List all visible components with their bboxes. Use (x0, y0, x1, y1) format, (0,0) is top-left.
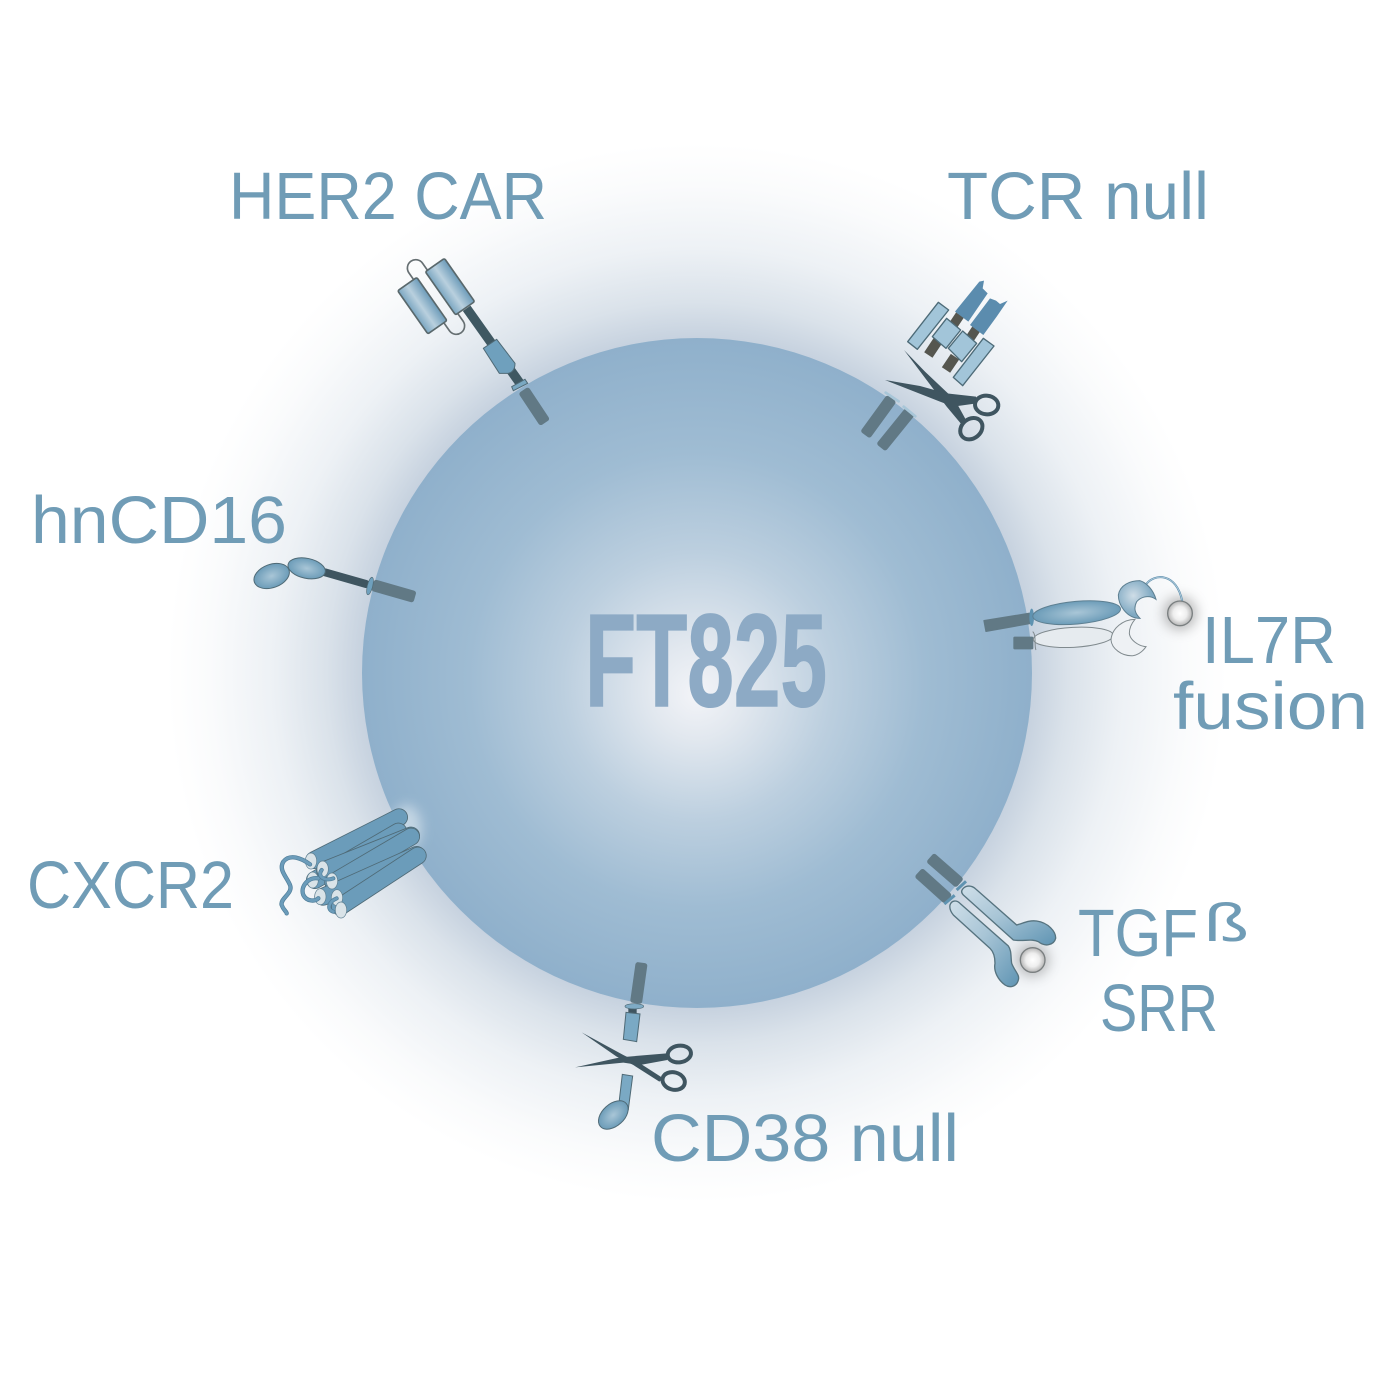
label: TCR null: TCR null (947, 159, 1209, 234)
label: CXCR2: CXCR2 (27, 848, 234, 923)
icon: TCR null with scissors (860, 281, 1008, 451)
label: TGF beta SRR (1078, 893, 1249, 1046)
label: IL7R fusion (1173, 603, 1368, 744)
icon: IL7R fusion receptor (984, 577, 1197, 656)
label: CD38 null: CD38 null (651, 1101, 959, 1176)
cell name: FT825 (585, 587, 827, 734)
icon: CD38 null with scissors (575, 962, 692, 1135)
label: TGF beta SRR: SRR (1100, 971, 1218, 1046)
label: hnCD16: hnCD16 (31, 483, 287, 558)
label: TGF beta SRR: ß (1204, 893, 1249, 953)
icon: hnCD16 receptor (250, 555, 417, 603)
label: IL7R fusion: fusion (1173, 669, 1368, 744)
cell body (362, 338, 1032, 1008)
label: IL7R fusion: IL7R (1202, 603, 1336, 678)
icon: HER2 CAR receptor (398, 256, 550, 426)
halo around cell (167, 143, 1227, 1203)
icon: TGF beta SRR receptor (914, 853, 1056, 987)
icon: CXCR2 receptor (282, 805, 422, 918)
label: HER2 CAR: HER2 CAR (229, 159, 547, 234)
label: TGF beta SRR: TGF (1078, 896, 1198, 971)
